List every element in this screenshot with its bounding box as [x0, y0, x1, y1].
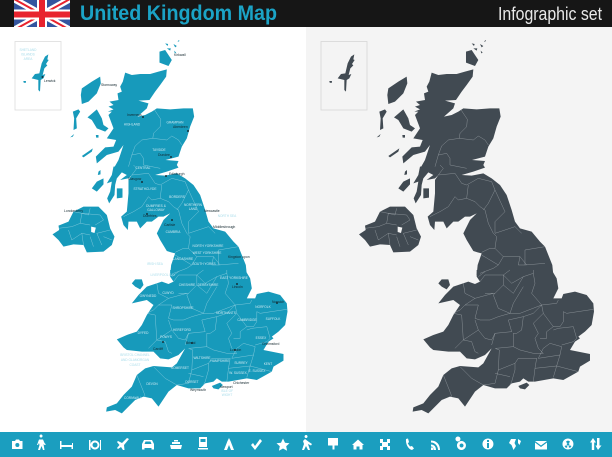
- region labels: HAMPSHIRE: [211, 359, 229, 363]
- sea labels: COAST: [130, 363, 141, 367]
- city labels: Chelmsford: [262, 342, 279, 346]
- region labels: NORTHERN: [184, 203, 203, 207]
- region labels: E. SUSSEX: [249, 369, 266, 373]
- region labels: HIGHLAND: [124, 122, 141, 126]
- icon: cutlery: [89, 440, 101, 450]
- region labels: DYFED: [138, 331, 149, 335]
- icon: bed: [60, 441, 73, 449]
- region labels: CHESHIRE: [179, 283, 195, 287]
- icon: walker: [37, 435, 46, 450]
- panel: colour map: [15, 40, 287, 413]
- city labels: Inverness: [127, 113, 142, 117]
- icon: up down arrows: [590, 438, 602, 450]
- region labels: HEREFORD: [173, 328, 192, 332]
- city labels: Newcastle: [204, 209, 220, 213]
- city labels: Weymouth: [190, 388, 206, 392]
- city labels: Aberdeen: [173, 125, 188, 129]
- sea labels: WIGHT: [222, 393, 232, 397]
- icon: speech sign: [328, 438, 338, 450]
- region labels: CORNWALL: [124, 396, 142, 400]
- city labels: Chichester: [233, 381, 250, 385]
- inset: Shetland colour: AREA: [24, 57, 33, 61]
- region labels: GRAMPIAN: [166, 120, 184, 124]
- region labels: DORSET: [185, 380, 199, 384]
- sea labels: ISLE OF: [221, 389, 233, 393]
- city labels: Middlesbrough: [213, 225, 235, 229]
- region labels: WEST YORKSHIRE: [193, 251, 221, 255]
- sea labels: AND GLAMORGAN: [121, 358, 150, 362]
- city labels: Newport: [220, 385, 233, 389]
- city labels: Dundee: [158, 153, 170, 157]
- city labels: Carlisle: [164, 223, 175, 227]
- sea labels: NORTH SEA: [218, 214, 237, 218]
- region labels: SHROPSHIRE: [172, 306, 194, 310]
- region labels: CUMBRIA: [166, 230, 181, 234]
- city labels: Stornoway: [101, 83, 117, 87]
- city labels: Lincoln: [232, 285, 243, 289]
- inset: Shetland colour: ISLANDS: [21, 52, 35, 56]
- sea labels: BRISTOL CHANNEL: [120, 353, 150, 357]
- city labels: Dumfries: [143, 214, 157, 218]
- right panel background: [306, 27, 612, 432]
- region labels: DUMFRIES &: [146, 204, 167, 208]
- region labels: GWYNEDD: [140, 294, 157, 298]
- icon: house: [352, 440, 364, 450]
- icon: union jack flag: [14, 0, 70, 30]
- city labels: Bristol: [186, 341, 196, 345]
- icon: command symbol: [380, 439, 390, 450]
- icon: phone: [406, 438, 414, 450]
- region labels: NORFOLK: [255, 305, 272, 309]
- region labels: GALLOWAY: [147, 208, 166, 212]
- city labels: Edinburgh: [169, 172, 185, 176]
- region labels: CLWYD: [162, 291, 174, 295]
- region labels: NORTHANTS: [216, 311, 236, 315]
- region labels: DEVON: [146, 382, 158, 386]
- region labels: KENT: [264, 362, 272, 366]
- region labels: LANCASHIRE: [173, 257, 193, 261]
- city labels: Kingston upon: [228, 255, 250, 259]
- city labels: Glasgow: [128, 177, 142, 181]
- region labels: TAYSIDE: [152, 148, 166, 152]
- icon: envelope: [535, 441, 547, 450]
- map: United Kingdom dark: [359, 40, 594, 413]
- region labels: LAND: [189, 207, 198, 211]
- icon: camera: [12, 440, 22, 449]
- region labels: WILTSHIRE: [193, 356, 211, 360]
- icon: gears: [455, 436, 466, 450]
- icon: globe: [509, 439, 521, 450]
- icon: radiation: [562, 438, 573, 449]
- region labels: NORTH YORKSHIRE: [193, 244, 223, 248]
- city labels: [64, 53, 284, 392]
- icon: car: [142, 440, 154, 450]
- region labels: CAMBRIDGE: [237, 318, 257, 322]
- region labels: BORDERS: [169, 195, 185, 199]
- icon: star: [276, 438, 290, 451]
- panel: dark map: [321, 40, 594, 413]
- icon: train: [198, 437, 208, 450]
- region labels: POWYS: [160, 335, 172, 339]
- city labels: Londonderry: [64, 209, 83, 213]
- icon: ship: [170, 440, 182, 449]
- region labels: CENTRAL: [136, 166, 151, 170]
- region labels: ESSEX: [256, 336, 267, 340]
- icon: tent: [224, 438, 234, 450]
- city labels: Norwich: [272, 300, 284, 304]
- region labels: EAST YORKSHIRE: [220, 276, 248, 280]
- icon: runner: [302, 435, 312, 450]
- inset: Shetland colour: [15, 42, 61, 110]
- city labels: London: [230, 348, 241, 352]
- sea labels: LIVERPOOL BAY: [151, 273, 176, 277]
- region labels: SOUTH YORKS: [192, 262, 216, 266]
- region labels: SUFFOLK: [266, 317, 281, 321]
- region labels: [124, 120, 281, 400]
- inset: Shetland colour: SHETLAND: [19, 48, 37, 52]
- map: United Kingdom regions: [52, 40, 287, 413]
- inset: Shetland dark: [321, 42, 367, 110]
- region labels: W. SUSSEX: [229, 371, 248, 375]
- header bar: [0, 0, 612, 27]
- region labels: SOMERSET: [171, 366, 189, 370]
- city labels: Cardiff: [153, 347, 163, 351]
- region labels: SURREY: [234, 361, 249, 365]
- icon: info: [482, 438, 493, 449]
- sea labels: [120, 214, 237, 397]
- inset: Shetland colour: Lerwick: [44, 79, 56, 83]
- region labels: STRATHCLYDE: [134, 187, 156, 191]
- icon: rss: [431, 440, 440, 450]
- title: United Kingdom Map: [80, 2, 277, 25]
- icon: check: [251, 439, 262, 450]
- icon: airplane: [117, 438, 129, 450]
- sea labels: IRISH SEA: [147, 262, 164, 266]
- region labels: DERBYSHIRE: [198, 283, 218, 287]
- city labels: Kirkwall: [174, 53, 186, 57]
- icon bar: [0, 432, 612, 457]
